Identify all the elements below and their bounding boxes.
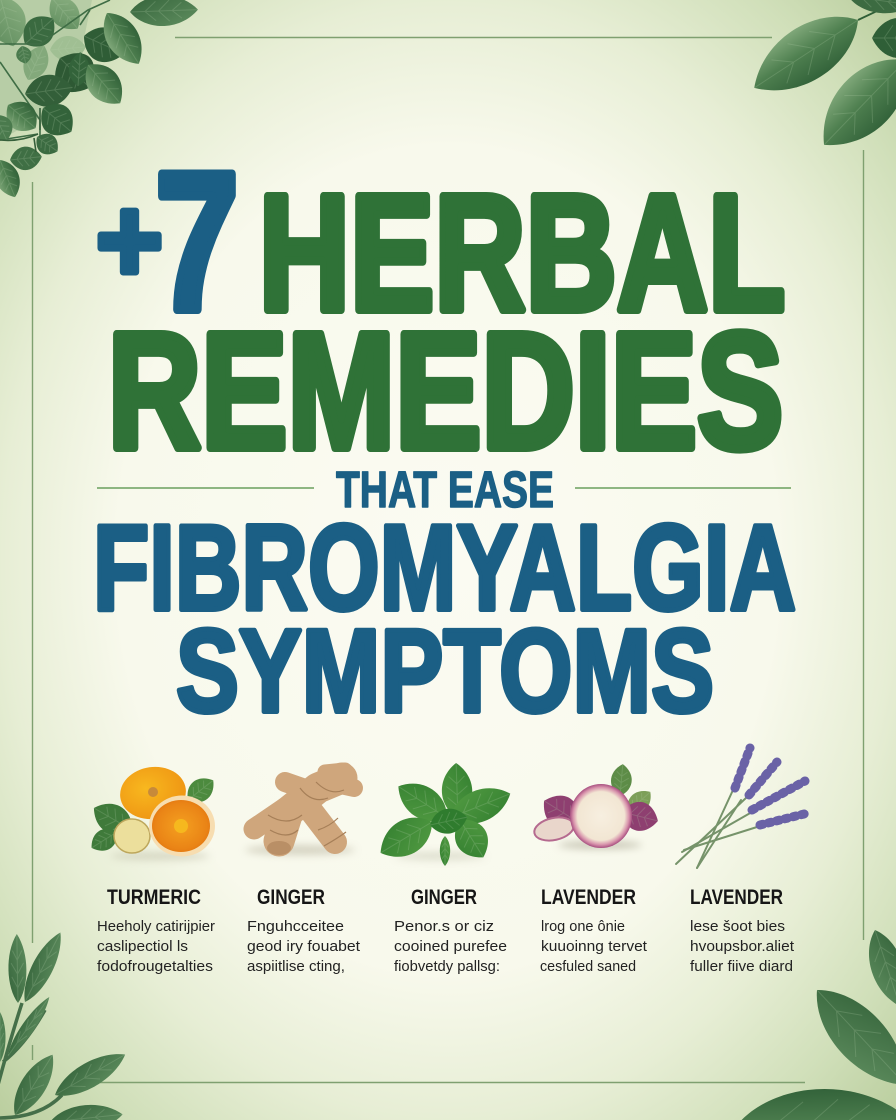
- label: GINGER: [411, 886, 477, 909]
- herbal remedies: [108, 161, 785, 483]
- description: [690, 918, 795, 975]
- that ease: THAT EASE: [336, 461, 554, 518]
- description: [394, 918, 507, 975]
- icon: mint sprig: [372, 763, 516, 868]
- description: lrog one ônie: [541, 918, 625, 935]
- label: GINGER: [257, 886, 325, 909]
- plus seven: 7: [155, 132, 239, 352]
- description: Fnguhcceitee: [247, 918, 344, 935]
- plus seven: [96, 132, 239, 352]
- icon: sliced purple root: [532, 763, 661, 849]
- icon: ginger root: [245, 770, 355, 855]
- remedy: turmeric: [86, 763, 220, 975]
- description: aspiitlise cting,: [247, 958, 345, 975]
- icon: lavender bunch: [676, 748, 808, 868]
- remedy: lavender: [676, 748, 808, 975]
- foliage: top right: [739, 0, 896, 165]
- label: TURMERIC: [107, 886, 201, 909]
- description: kuuoinng tervet: [541, 938, 648, 955]
- description: cooined purefee: [394, 938, 507, 955]
- fibromyalgia symptoms: [93, 500, 796, 738]
- description: hvoupsbor.aliet: [690, 938, 795, 955]
- description: [97, 918, 215, 975]
- icon: turmeric and citrus: [86, 763, 220, 860]
- remedy: lavender root: [532, 763, 661, 975]
- description: fuller fiive diard: [690, 958, 793, 975]
- fibromyalgia symptoms: SYMPTOMS: [176, 606, 714, 738]
- description: [540, 918, 648, 975]
- label: LAVENDER: [541, 886, 636, 909]
- foliage: top left: [0, 0, 198, 201]
- description: geod iry fouabet: [247, 938, 361, 955]
- remedy: mint: [372, 763, 516, 975]
- plus seven: +: [96, 174, 163, 308]
- description: fiobvetdy pallsg:: [394, 958, 500, 975]
- foliage: bottom left: [0, 928, 131, 1120]
- description: Penor.s or ciz: [394, 918, 494, 935]
- description: fodofrougetalties: [97, 958, 213, 975]
- description: lese šoot bies: [690, 918, 785, 935]
- description: cesfuled saned: [540, 958, 636, 975]
- remedy: ginger: [245, 770, 361, 975]
- label: LAVENDER: [690, 886, 783, 909]
- description: [247, 918, 361, 975]
- description: caslipectiol ls: [97, 938, 188, 955]
- description: Heeholy catirijpier: [97, 918, 215, 935]
- title: [93, 132, 796, 738]
- foliage: bottom right: [736, 925, 896, 1120]
